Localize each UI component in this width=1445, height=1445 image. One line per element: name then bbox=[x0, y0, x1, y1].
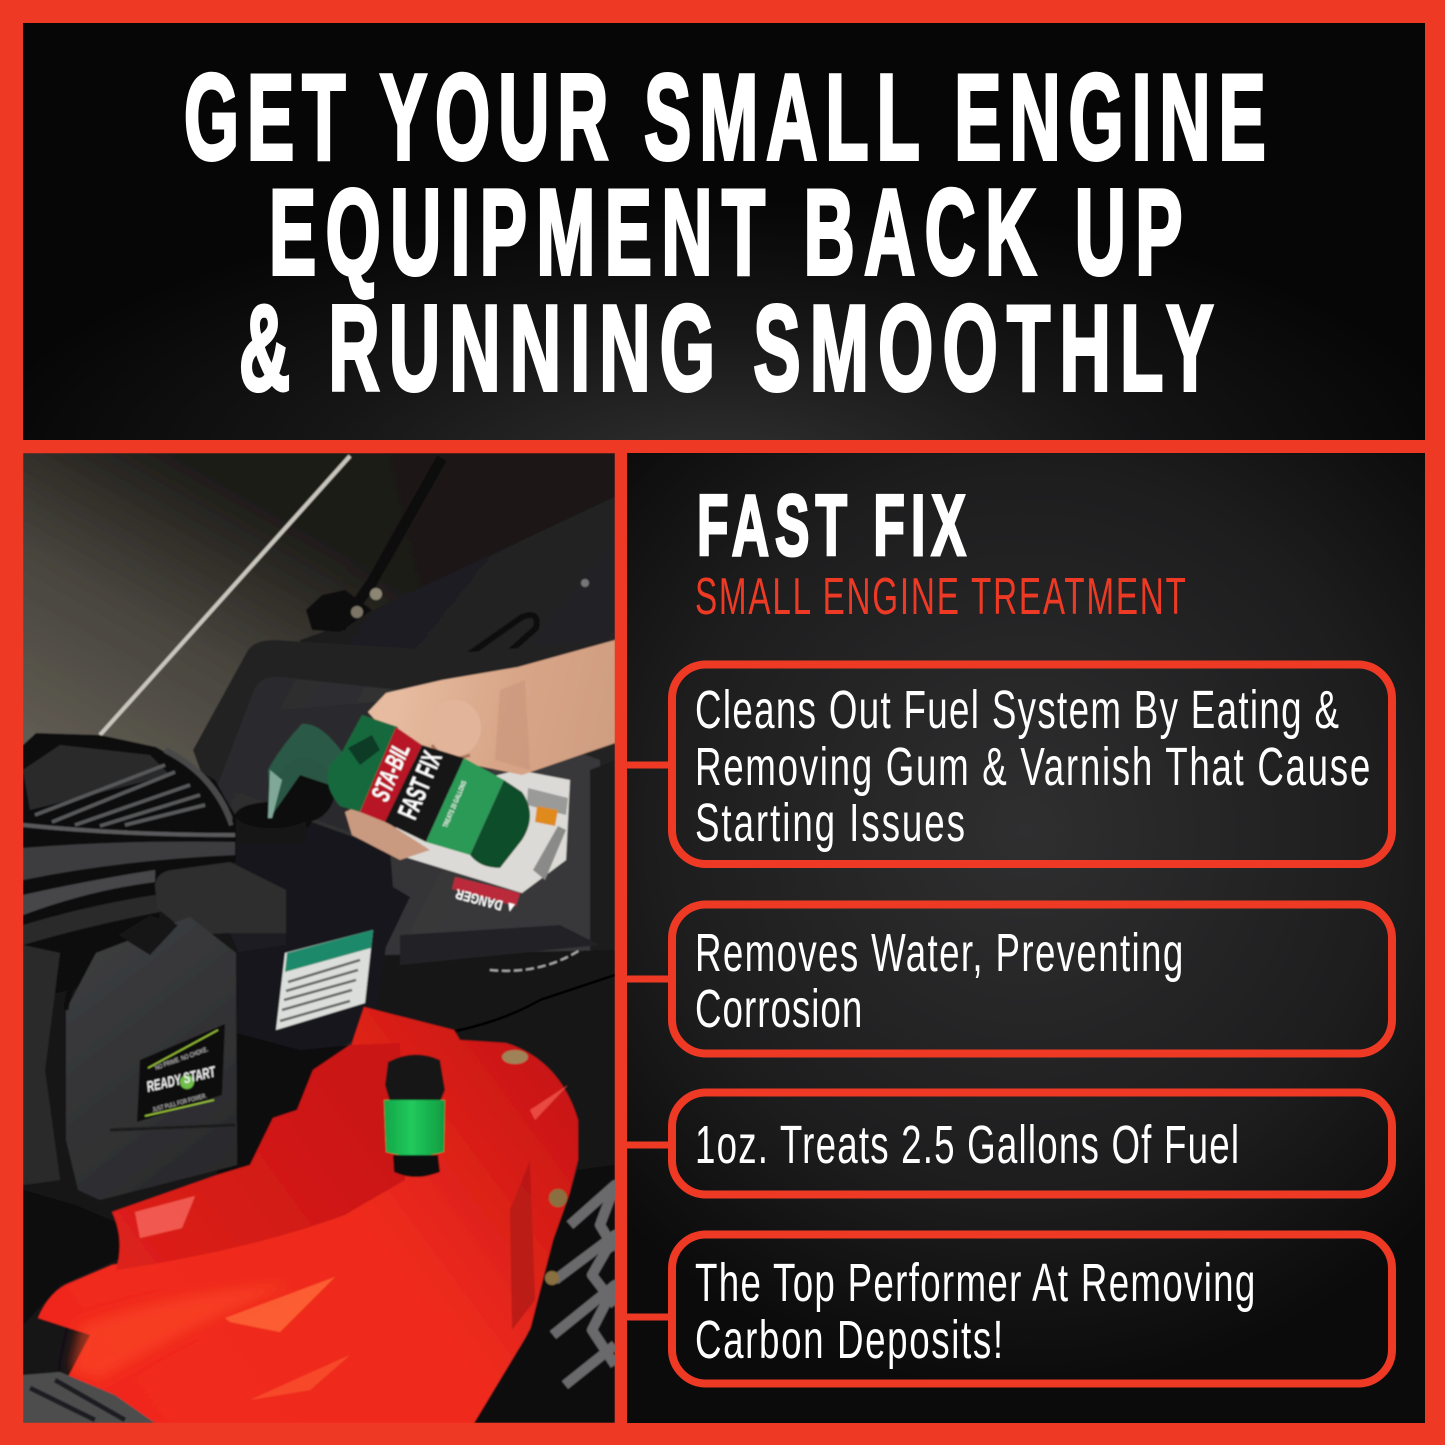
callout: treats gallons bbox=[627, 1092, 1392, 1194]
panel: headline bbox=[23, 23, 1425, 440]
engine cover bbox=[23, 915, 237, 1200]
black label bbox=[385, 745, 464, 842]
badge: ready start bbox=[137, 1024, 225, 1122]
right wheel bbox=[474, 1165, 615, 1423]
fuel cap opening bbox=[232, 813, 312, 828]
title: & RUNNING SMOOTHLY bbox=[239, 281, 1213, 417]
callout: cleans fuel system: Starting Issues bbox=[695, 792, 965, 853]
bottle: STA-BIL bbox=[365, 738, 416, 805]
callout: cleans fuel system: Removing Gum & Varnish That Cause bbox=[695, 736, 1370, 797]
heading: fast fix: FAST FIX bbox=[697, 479, 966, 574]
callout: removes water bbox=[627, 904, 1392, 1054]
bottle body end bbox=[470, 780, 530, 868]
callout: top performer: Carbon Deposits! bbox=[695, 1309, 1003, 1370]
inner deck well bbox=[112, 1043, 405, 1270]
deck highlights bbox=[70, 1085, 568, 1400]
dipstick rod bbox=[100, 456, 350, 735]
hand bbox=[345, 640, 615, 860]
callout: top performer bbox=[627, 1234, 1392, 1384]
subheading: SMALL ENGINE TREATMENT bbox=[695, 568, 1186, 626]
danger tag bbox=[452, 877, 520, 906]
cable bbox=[454, 974, 615, 1032]
bottle: TREATS 20 GALLONS bbox=[442, 780, 468, 829]
handle arm bbox=[306, 458, 589, 632]
callout: top performer: The Top Performer At Removing bbox=[695, 1252, 1255, 1313]
panel: product photo bbox=[23, 453, 615, 1423]
badge: ready start: JUST PULL FOR POWER. bbox=[152, 1093, 208, 1114]
emission label bbox=[276, 930, 373, 1030]
red band bbox=[360, 727, 422, 822]
panel: frame bars bbox=[23, 440, 1425, 1423]
callout: treats gallons: 1oz. Treats 2.5 Gallons Of Fuel bbox=[695, 1114, 1239, 1175]
fingers bbox=[345, 805, 430, 860]
fuel tank bbox=[154, 775, 410, 1050]
bottle bbox=[268, 715, 530, 868]
badge: ready start: READY START bbox=[145, 1063, 218, 1096]
title bbox=[184, 50, 1266, 417]
callout: removes water: Removes Water, Preventing bbox=[695, 922, 1183, 983]
black engine base bbox=[217, 1030, 350, 1180]
warning label: ▲ DANGER bbox=[454, 886, 518, 918]
upper red deck bbox=[38, 1007, 578, 1423]
engine shroud bbox=[23, 733, 240, 1000]
green label bbox=[426, 758, 504, 855]
rear mower plate bbox=[300, 498, 615, 652]
garage wall bbox=[23, 453, 446, 770]
tank box bbox=[155, 862, 286, 935]
title: GET YOUR SMALL ENGINE bbox=[184, 50, 1266, 186]
title: EQUIPMENT BACK UP bbox=[269, 165, 1182, 301]
rear housing bbox=[193, 640, 615, 1060]
callout: removes water: Corrosion bbox=[695, 978, 862, 1039]
glass neck and stream bbox=[268, 724, 342, 815]
badge: ready start: NO PRIME. NO CHOKE. bbox=[154, 1046, 209, 1072]
left wheel bbox=[23, 1372, 155, 1423]
callout: cleans fuel system bbox=[627, 664, 1392, 864]
panel: benefits bbox=[627, 453, 1425, 1423]
warning label bbox=[392, 770, 570, 918]
green hose connector bbox=[384, 1054, 445, 1177]
bottle: FAST FIX bbox=[392, 747, 448, 823]
rim bolt bbox=[502, 1050, 528, 1064]
callout: cleans fuel system: Cleans Out Fuel System By Eating & bbox=[695, 679, 1339, 740]
vent slot bbox=[468, 612, 540, 652]
housing recess bbox=[216, 678, 600, 956]
dark gap bbox=[23, 1190, 122, 1325]
